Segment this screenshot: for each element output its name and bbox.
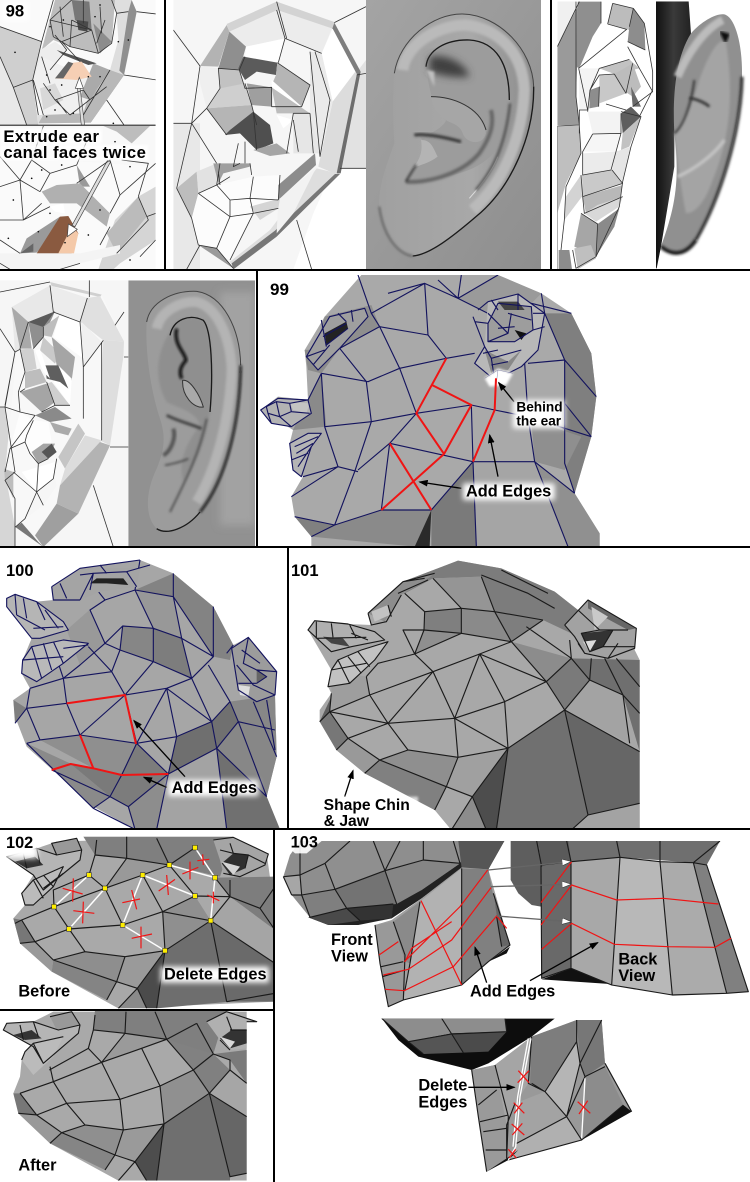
arrow: add edges right <box>530 943 598 981</box>
panel: step 100 head with add edges <box>7 560 280 829</box>
head underside <box>382 1018 555 1070</box>
arrows linking views <box>488 862 570 922</box>
red edges back <box>541 862 731 949</box>
label: delete edges: Delete Edges <box>164 966 267 984</box>
label: shape chin and jaw: Shape Chin <box>324 797 410 814</box>
label: front view <box>331 931 373 966</box>
dots: vertices <box>8 5 130 260</box>
label: front view: View <box>331 948 368 966</box>
label: delete edges: Edges <box>418 1093 467 1111</box>
icon: ear mesh <box>473 294 545 387</box>
label: front view: Front <box>331 931 373 949</box>
head silhouette with mesh <box>3 1010 247 1181</box>
panel: side ear wireframe <box>557 1 653 269</box>
icon: eye mesh <box>306 308 368 370</box>
panel: step 103 add edges <box>283 841 748 1007</box>
icon: ear mesh <box>213 837 268 877</box>
panel: step 102 after <box>3 1010 257 1181</box>
step number 98 <box>6 5 24 16</box>
icon: nose mesh <box>7 594 88 682</box>
label: shape chin and jaw: & Jaw <box>324 813 370 830</box>
label: behind the ear: the ear <box>516 414 562 429</box>
head silhouette with mesh <box>7 837 275 1008</box>
step number 99: 99 <box>270 280 289 299</box>
label: back view: Back <box>618 950 658 968</box>
arrow: add edges left <box>475 947 487 983</box>
panel: rear ear wireframe <box>0 280 128 547</box>
step number 102 <box>4 834 37 858</box>
label: add edges: Add Edges <box>466 483 551 501</box>
red edges front <box>379 870 507 991</box>
arrow: add edges up <box>134 721 185 777</box>
arrow: chin <box>345 771 353 797</box>
step number 101: 101 <box>291 562 319 580</box>
icon: nose and eye mesh <box>3 1012 80 1075</box>
white edges to delete <box>508 1038 585 1160</box>
panel: smooth ear front render <box>366 0 541 269</box>
label: behind the ear <box>513 400 565 429</box>
label: back view: View <box>618 967 656 985</box>
panel: step 103 delete edges <box>382 1018 632 1172</box>
panel: step 98 ear canal wireframes <box>0 0 157 269</box>
red delete crosses <box>63 854 219 948</box>
label: back view <box>618 950 658 985</box>
label: delete edges: Delete <box>418 1077 467 1095</box>
step number 102: 102 <box>6 834 33 852</box>
head silhouette with mesh <box>308 561 640 830</box>
icon: extrude arrow bottom <box>67 161 111 237</box>
panel: smooth ear side render <box>656 1 742 268</box>
back view neck <box>511 841 748 995</box>
panel: smooth ear rear render <box>128 280 255 547</box>
yellow vertices <box>52 845 217 953</box>
label: extrude ear canal faces twice: canal faces twice <box>3 143 146 162</box>
step number 103 <box>282 834 322 853</box>
icon: nose mesh <box>261 398 321 477</box>
icon: ear mesh <box>207 1012 257 1050</box>
head silhouette with mesh <box>7 560 280 829</box>
label: extrude ear canal faces twice: Extrude ear <box>3 127 100 146</box>
step number 98: 98 <box>6 1 24 20</box>
label: delete edges <box>418 1077 467 1111</box>
icon: nose and eye mesh <box>7 838 82 905</box>
red crosses <box>508 1071 590 1158</box>
icon: eye mesh <box>52 560 150 600</box>
icon: extrude arrow top <box>75 77 85 128</box>
front view head <box>283 841 504 925</box>
head silhouette with mesh <box>261 275 600 547</box>
label: shape chin and jaw <box>321 797 418 830</box>
step number 103: 103 <box>291 834 318 852</box>
label: add edges: Add Edges <box>470 982 555 1000</box>
panel: step 102 before <box>4 834 275 1008</box>
icon: nose mesh <box>308 621 388 687</box>
white edges to delete <box>54 848 215 951</box>
neck <box>472 1020 632 1172</box>
label: before: Before <box>18 983 70 1001</box>
red added edges <box>52 695 168 775</box>
label: after: After <box>18 1157 57 1175</box>
arrow: behind the ear <box>499 383 514 402</box>
label: behind the ear: Behind <box>516 400 563 415</box>
arrow: add edges upward <box>490 435 498 477</box>
icon: eye mesh <box>368 573 435 625</box>
panel: step 101 shaped head <box>308 561 640 830</box>
panel: front ear wireframe <box>173 0 366 269</box>
step number 100: 100 <box>6 562 34 580</box>
red added edges <box>381 358 496 510</box>
panel: step 99 head with add edges <box>261 275 600 547</box>
icon: ear mesh <box>565 600 636 658</box>
arrow: add edges left <box>144 777 167 787</box>
front view neck <box>375 867 510 1007</box>
arrow: delete edges <box>468 1085 514 1089</box>
label: add edges: Add Edges <box>172 779 257 797</box>
label: extrude ear canal faces twice <box>0 127 148 162</box>
icon: ear mesh <box>232 637 277 702</box>
arrow: add edges left <box>420 482 461 488</box>
